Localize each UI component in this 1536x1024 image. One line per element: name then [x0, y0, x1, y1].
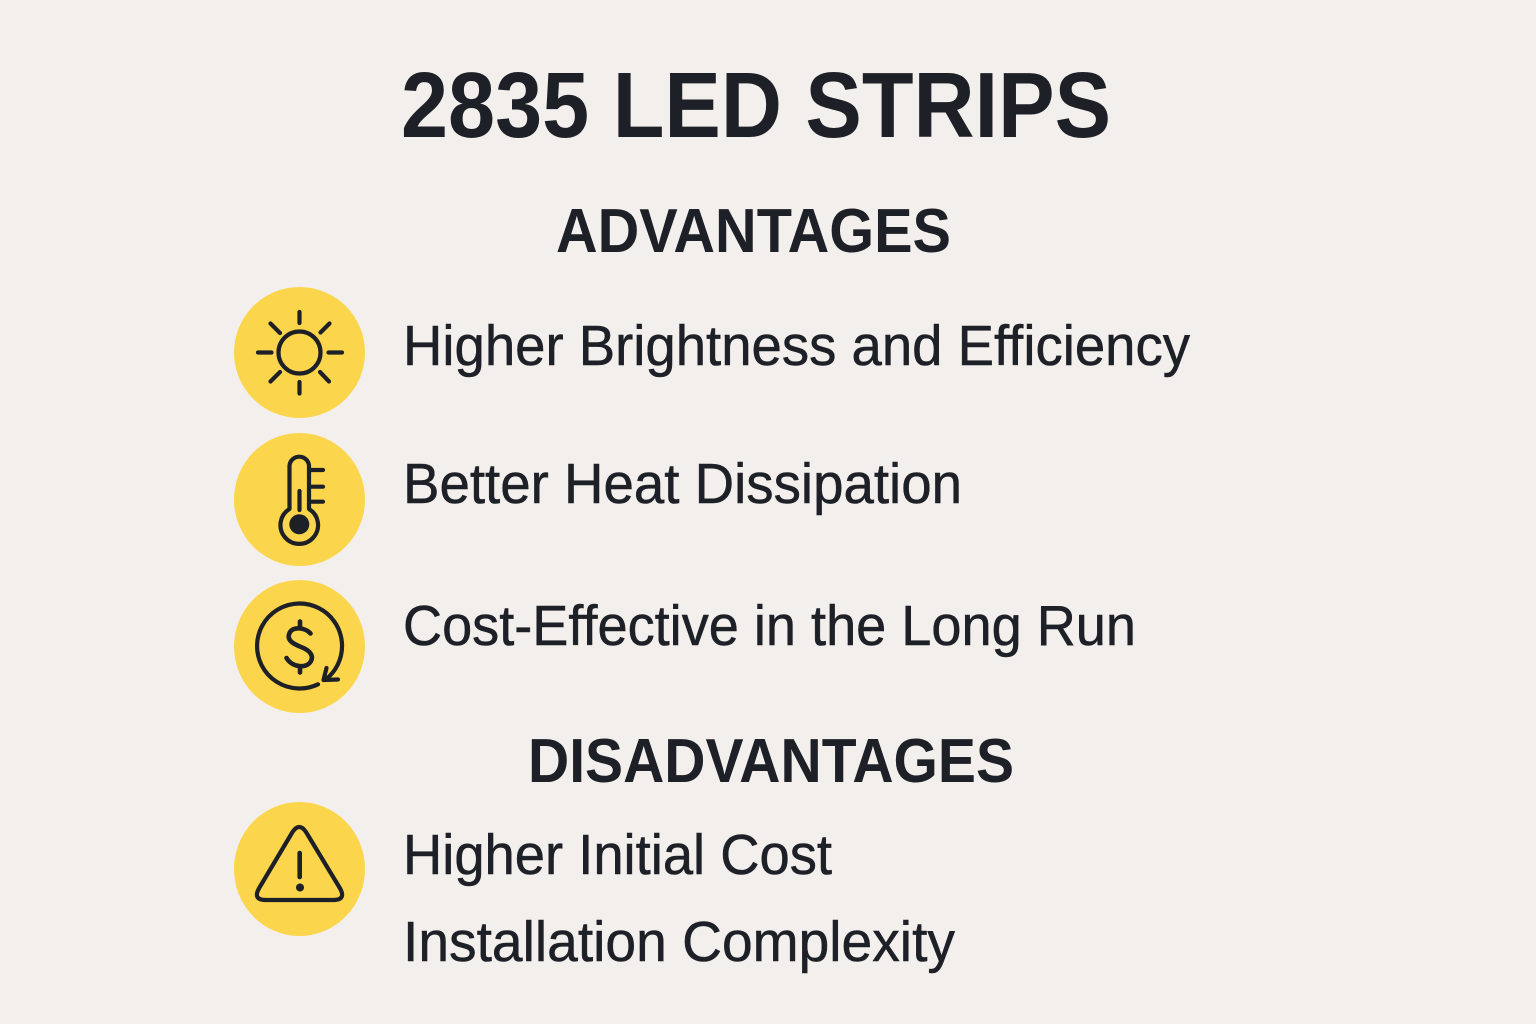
- text: installation complexity: Installation Complexity: [403, 910, 955, 974]
- text: cost-effective in the long run: Cost-Effective in the Long Run: [403, 594, 1136, 658]
- icon: warning triangle: [234, 802, 365, 936]
- icon: thermometer: [234, 433, 365, 566]
- icon: sun: [234, 287, 365, 418]
- title: 2835 LED STRIPS: [401, 53, 1111, 157]
- heading: advantages: ADVANTAGES: [556, 196, 951, 266]
- text: higher initial cost: Higher Initial Cost: [403, 823, 832, 887]
- text: better heat dissipation: Better Heat Dissipation: [403, 452, 962, 516]
- icon: dollar cycle: [234, 580, 365, 713]
- text: higher brightness and efficiency: Higher Brightness and Efficiency: [403, 314, 1190, 378]
- heading: disadvantages: DISADVANTAGES: [528, 726, 1014, 796]
